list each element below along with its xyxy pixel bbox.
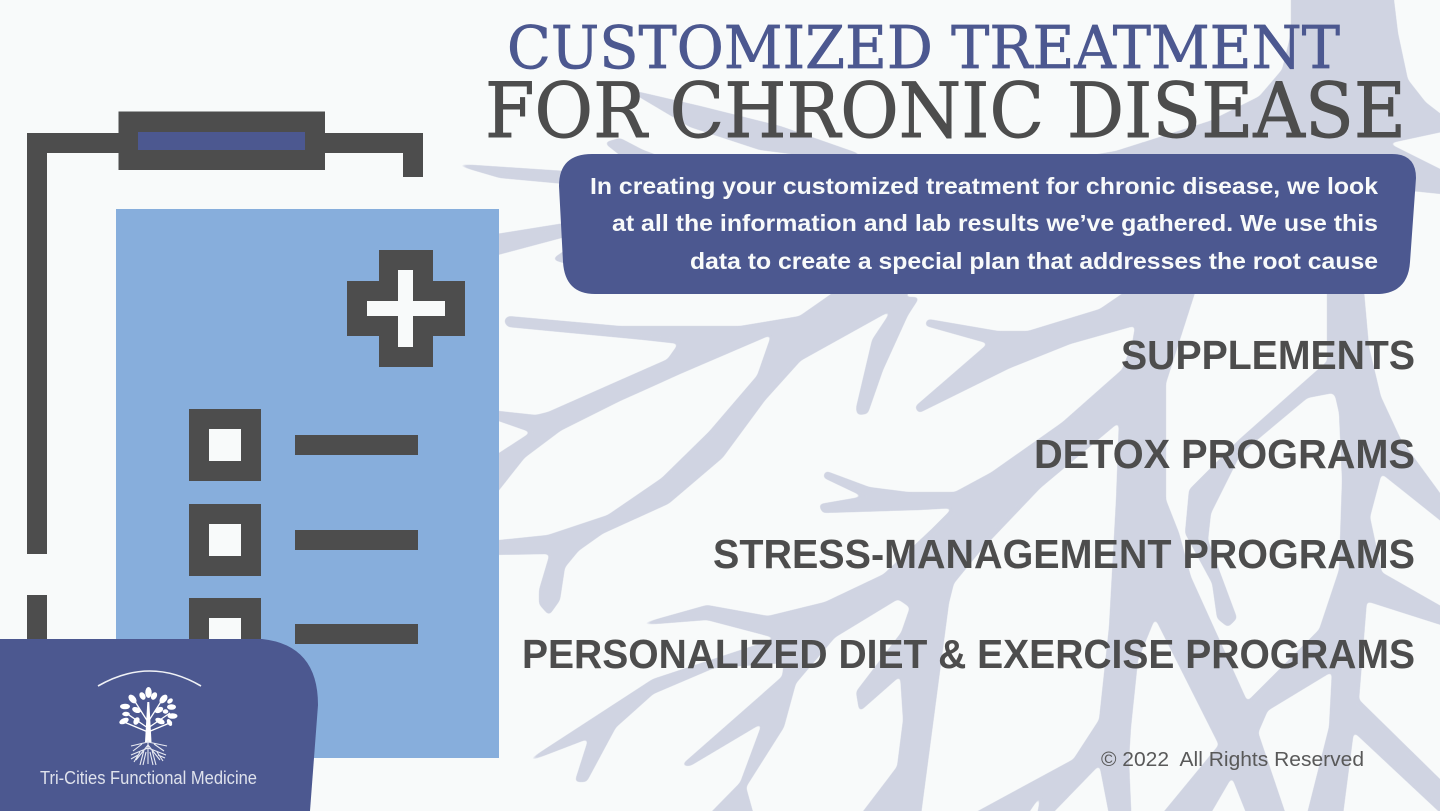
list item: supplements: SUPPLEMENTS [1121,332,1415,378]
icon: logo tree [118,687,178,742]
icon: medical cross [347,250,465,367]
checklist row 2 [189,504,418,576]
list item: detox programs: DETOX PROGRAMS [1034,431,1415,477]
copyright: © 2022 All Rights Reserved [1101,749,1364,771]
clipboard paper [116,209,499,758]
intro text [590,173,1378,274]
intro text: In creating your customized treatment for chronic disease, we look [590,173,1378,199]
background tree silhouette [459,0,1440,811]
list item: stress-management programs: STRESS-MANAGEMENT PROGRAMS [713,531,1415,577]
panel: intro callout [559,154,1416,294]
intro text: data to create a special plan that addresses the root cause [690,248,1378,274]
title: line 1: CUSTOMIZED TREATMENT [507,13,1340,82]
intro text: at all the information and lab results we’ve gathered. We use this [612,210,1378,236]
logo arc [98,671,201,686]
checklist row 1 [189,409,418,481]
title: line 2: FOR CHRONIC DISEASE [485,66,1406,155]
list item: personalized diet and exercise programs: PERSONALIZED DIET & EXERCISE PROGRAMS [522,631,1415,677]
checklist row 3 [189,598,418,670]
panel: logo badge [0,639,318,811]
clipboard clip [118,112,325,170]
icon: clipboard [27,112,499,758]
icon: logo roots [131,740,167,765]
logo name: Tri-Cities Functional Medicine [40,768,257,788]
clipboard frame [27,133,423,645]
